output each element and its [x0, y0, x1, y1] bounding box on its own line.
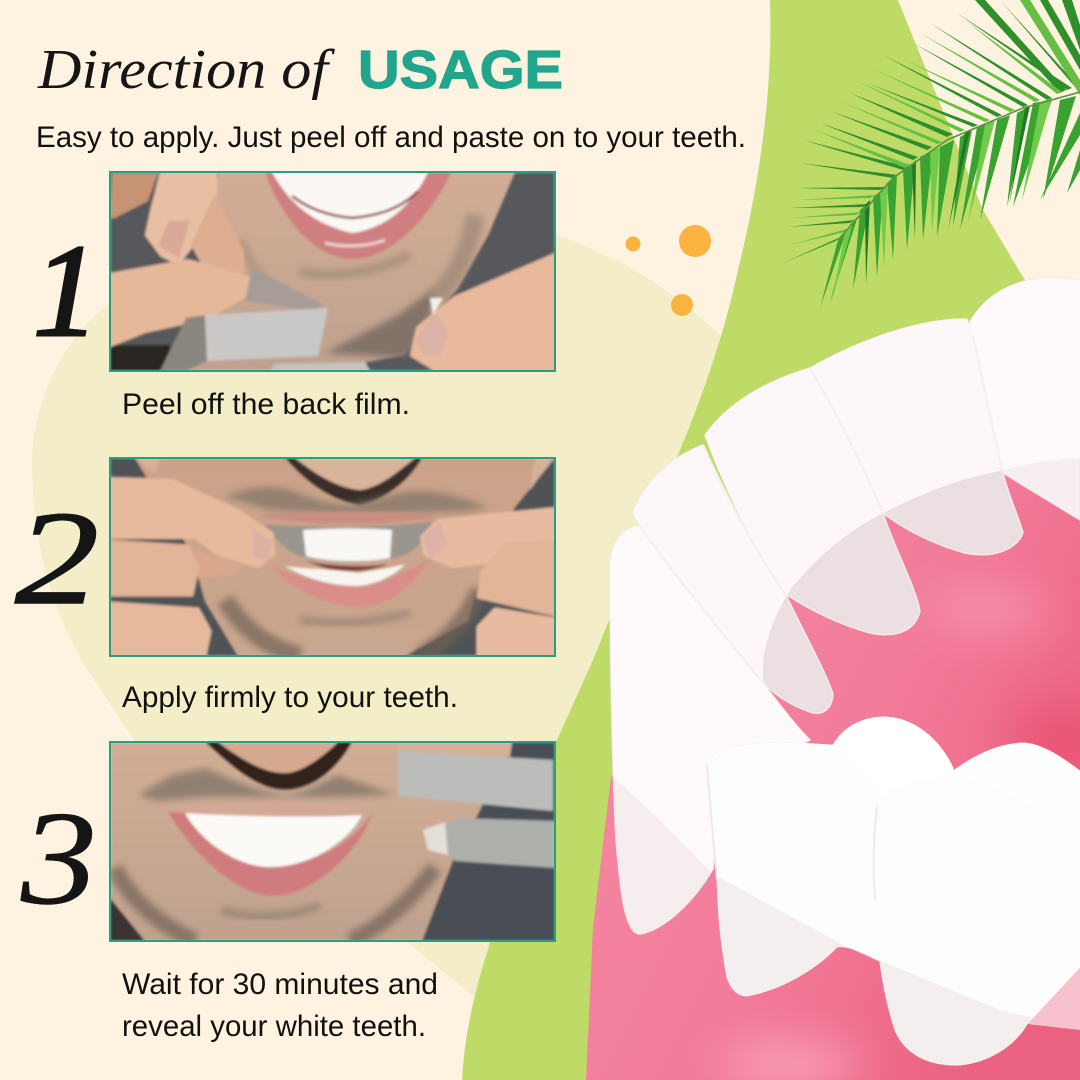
- subtitle: Easy to apply. Just peel off and paste on to your teeth.: [36, 121, 746, 154]
- photo border 2: [110, 458, 555, 656]
- photo: apply to teeth: [110, 458, 555, 656]
- step 1 number: 1: [33, 217, 99, 364]
- photo: peel off the back film: [110, 172, 555, 371]
- photo border 3: [110, 742, 555, 941]
- title: USAGE: [358, 40, 563, 100]
- caption 1: Peel off the back film.: [122, 388, 410, 421]
- caption 3: Wait for 30 minutes and: [122, 968, 438, 1001]
- caption 3 second line: reveal your white teeth.: [122, 1010, 426, 1043]
- whitening strip over lower teeth: [707, 717, 1080, 1018]
- whitening strip over upper teeth: [590, 270, 1080, 874]
- title: [37, 39, 563, 101]
- orange dots: [626, 225, 711, 316]
- lower tooth outline shading: [707, 765, 877, 900]
- upper teeth: [610, 278, 1080, 934]
- photo border 1: [110, 172, 555, 371]
- icon: palm leaf: [783, 0, 1080, 308]
- illustration: teeth and gums: [586, 270, 1080, 1080]
- photo: reveal white teeth: [110, 742, 555, 941]
- step 2 number: 2: [15, 484, 99, 632]
- lower teeth: [707, 717, 1080, 1065]
- caption 2: Apply firmly to your teeth.: [122, 681, 458, 714]
- gums: [586, 473, 1080, 1080]
- green swoosh: [462, 0, 1080, 1080]
- tooth separation shading: [640, 337, 1003, 683]
- pale green blob: [32, 234, 725, 997]
- title: Direction of: [37, 39, 336, 101]
- step 3 number: 3: [20, 784, 97, 932]
